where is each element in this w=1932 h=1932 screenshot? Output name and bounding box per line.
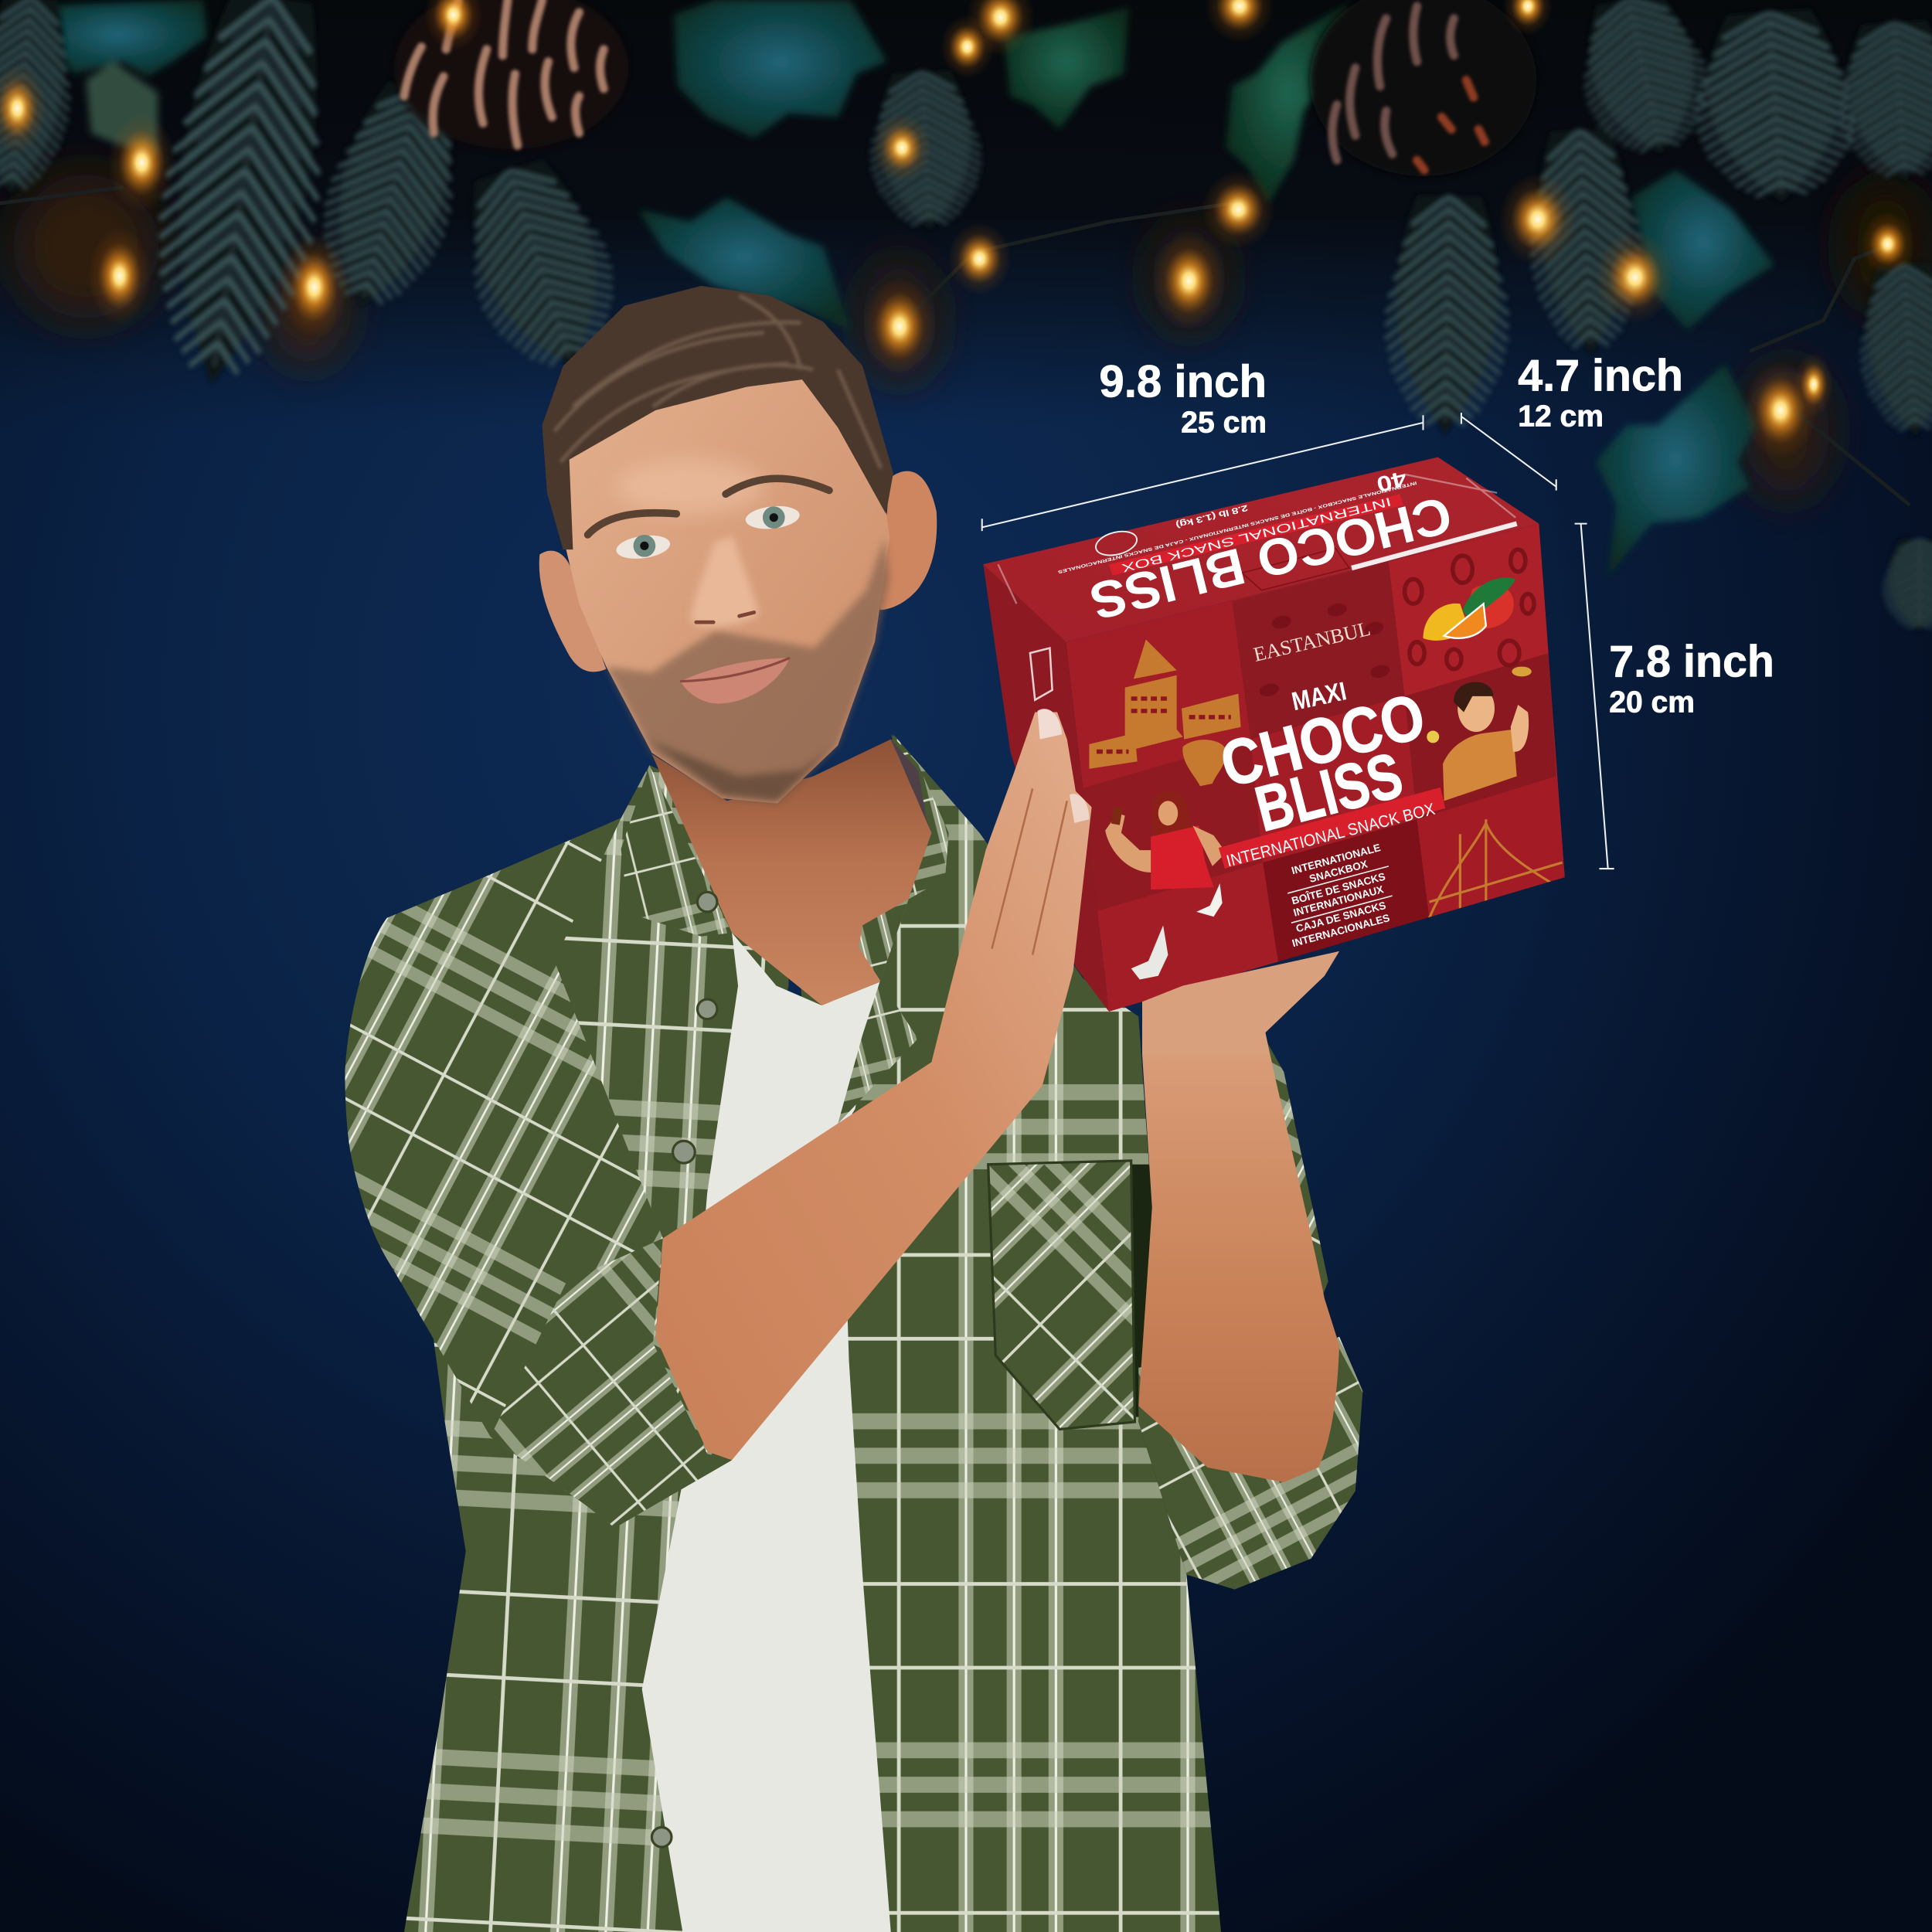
red banner	[1219, 787, 1445, 869]
inner collar	[891, 740, 931, 833]
left ear	[539, 551, 606, 672]
fingernails	[1037, 709, 1062, 740]
multilingual text: BOÎTE DE SNACKS	[1291, 871, 1386, 906]
hair	[543, 286, 893, 549]
nose	[691, 536, 759, 627]
shirt collar right	[838, 734, 949, 1124]
label: width: 9.8 inch	[1099, 356, 1267, 406]
garland	[0, 0, 1932, 632]
divider lines	[1287, 866, 1393, 923]
top tab	[1242, 549, 1349, 590]
mouth	[680, 658, 790, 703]
brand name: EASTANBUL	[1251, 617, 1372, 666]
bridge illustration	[1429, 819, 1563, 918]
forehead highlight	[616, 460, 764, 514]
multilingual text: INTERNATIONALE	[1290, 842, 1382, 876]
dimension lines	[982, 413, 1614, 869]
bird small	[1196, 883, 1223, 917]
top face labels: 2.8 lb (1.3 kg)	[1175, 503, 1249, 530]
choco title: CHOCO	[1213, 679, 1432, 801]
Galata tower illustration	[1089, 639, 1241, 769]
left cuff	[491, 1238, 732, 1528]
string lights	[0, 0, 1915, 505]
multilingual text: INTERNACIONALES	[1291, 912, 1391, 949]
buttons	[651, 892, 717, 1847]
second fingernail	[1070, 794, 1089, 823]
pine branches	[0, 0, 1932, 632]
label: height: 7.8 inch	[1609, 637, 1774, 686]
label: depth: 4.7 inch	[1518, 351, 1683, 400]
man illustration	[1427, 667, 1532, 801]
right sleeve strip	[1263, 1035, 1328, 1306]
lip line	[680, 658, 790, 682]
label: width	[1099, 356, 1267, 440]
box top face	[983, 457, 1539, 642]
pinecone right	[1310, 0, 1536, 176]
raised hand and forearm	[655, 709, 1092, 1460]
multilingual text: SNACKBOX	[1308, 858, 1369, 885]
label: width: 25 cm	[1181, 406, 1267, 440]
label: height: 20 cm	[1609, 686, 1695, 719]
finger creases	[992, 788, 1067, 955]
label: height	[1609, 637, 1774, 719]
woman illustration	[1105, 791, 1226, 889]
shadow between pocket and arm	[1131, 1165, 1156, 1417]
tape highlight	[1352, 524, 1517, 568]
warm glow patches	[12, 172, 1928, 499]
beard	[606, 539, 889, 804]
hot air balloon	[1182, 740, 1227, 786]
side icon	[1030, 648, 1053, 700]
right forearm	[1138, 1002, 1339, 1482]
wrinkled corner highlights	[998, 474, 1515, 604]
brows	[588, 478, 829, 535]
multilingual text	[1290, 842, 1391, 949]
multilingual text: CAJA DE SNACKS	[1294, 900, 1387, 934]
shirt body right front	[801, 734, 1221, 1932]
pinecone left	[394, 0, 628, 149]
fruit circles pattern	[1405, 549, 1534, 669]
top face labels: INTERNATIONALE SNACKBOX - BOÎTE DE SNACKS INTERNATIONAUX - CAJA DE SNACKS INTERNACIONALES	[1057, 481, 1417, 575]
box front face	[1066, 524, 1565, 1012]
white t-shirt	[642, 933, 891, 1932]
maxi label: MAXI	[1289, 676, 1349, 716]
hair strands	[554, 296, 881, 468]
fruit illustration	[1423, 577, 1515, 641]
tower windows	[1097, 699, 1231, 752]
right ear	[879, 471, 937, 610]
multilingual text: INTERNATIONAUX	[1292, 883, 1385, 919]
nostrils	[696, 612, 754, 622]
man	[345, 286, 1362, 1932]
chin stubble dark	[647, 740, 835, 801]
bird large	[1131, 925, 1168, 980]
top face labels: INTERNATIONAL SNACK BOX	[1120, 495, 1393, 575]
label: depth: 12 cm	[1518, 400, 1604, 434]
banner text: INTERNATIONAL SNACK BOX	[1224, 800, 1437, 870]
chest pocket	[988, 1161, 1134, 1429]
holly leaves	[29, 0, 1774, 577]
right hand under box	[1142, 951, 1339, 1055]
coffee bean pattern	[1258, 601, 1391, 699]
shirt body left front	[387, 765, 788, 1932]
label: depth	[1518, 351, 1683, 434]
top face labels: 40	[1374, 466, 1410, 497]
shirt collar left	[621, 765, 732, 937]
face	[560, 357, 889, 804]
eyes	[615, 504, 801, 562]
head	[539, 286, 937, 804]
left sleeve	[345, 818, 732, 1528]
box side	[983, 564, 1109, 1012]
snack box	[983, 457, 1565, 1012]
top face labels: CHOCO BLISS	[1084, 485, 1458, 631]
bliss title: BLISS	[1248, 739, 1410, 845]
right rolled sleeve	[1138, 1337, 1362, 1590]
neck	[651, 740, 931, 1005]
